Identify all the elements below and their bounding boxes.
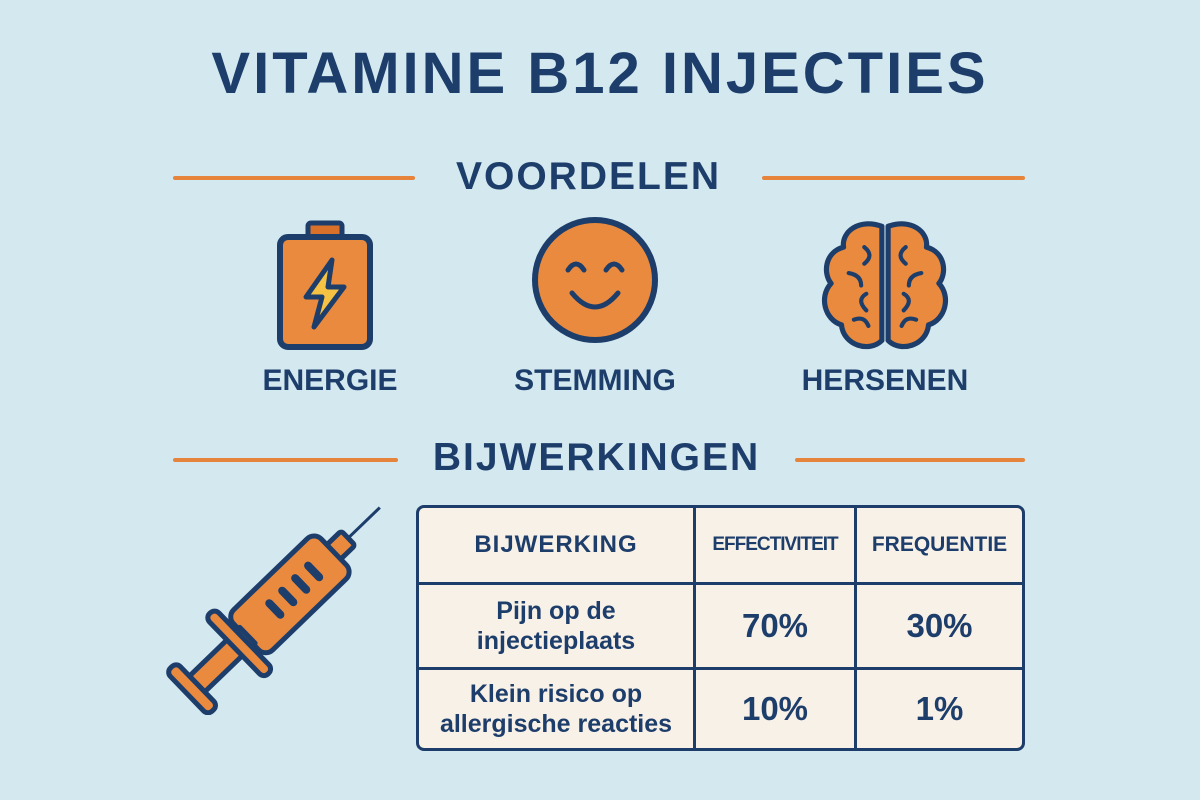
table: bijwerkingen: 1% bbox=[916, 690, 963, 727]
label: hersenen: HERSENEN bbox=[802, 364, 968, 397]
table: bijwerkingen: Klein risico op bbox=[470, 680, 642, 708]
table: bijwerkingen: FREQUENTIE bbox=[872, 533, 1007, 556]
table: bijwerkingen: allergische reacties bbox=[440, 710, 672, 738]
icon: syringe bbox=[166, 506, 381, 715]
icon: brain bbox=[822, 221, 948, 350]
title: VITAMINE B12 INJECTIES bbox=[211, 41, 989, 106]
heading: bijwerkingen: BIJWERKINGEN bbox=[433, 436, 760, 479]
table: bijwerkingen: EFFECTIVITEIT bbox=[712, 534, 838, 555]
heading: voordelen: VOORDELEN bbox=[456, 155, 721, 198]
icon: smiley bbox=[532, 217, 658, 343]
table: bijwerkingen bbox=[416, 505, 1025, 751]
table: bijwerkingen: 10% bbox=[742, 690, 808, 727]
table: bijwerkingen: 30% bbox=[906, 606, 973, 644]
table: bijwerkingen: 70% bbox=[742, 606, 808, 644]
table: bijwerkingen: BIJWERKING bbox=[474, 531, 638, 558]
table: bijwerkingen: injectieplaats bbox=[477, 626, 635, 654]
label: stemming: STEMMING bbox=[514, 364, 676, 397]
table: bijwerkingen: Pijn op de bbox=[496, 596, 616, 624]
label: energie: ENERGIE bbox=[262, 364, 398, 397]
icon: battery bbox=[277, 220, 373, 350]
